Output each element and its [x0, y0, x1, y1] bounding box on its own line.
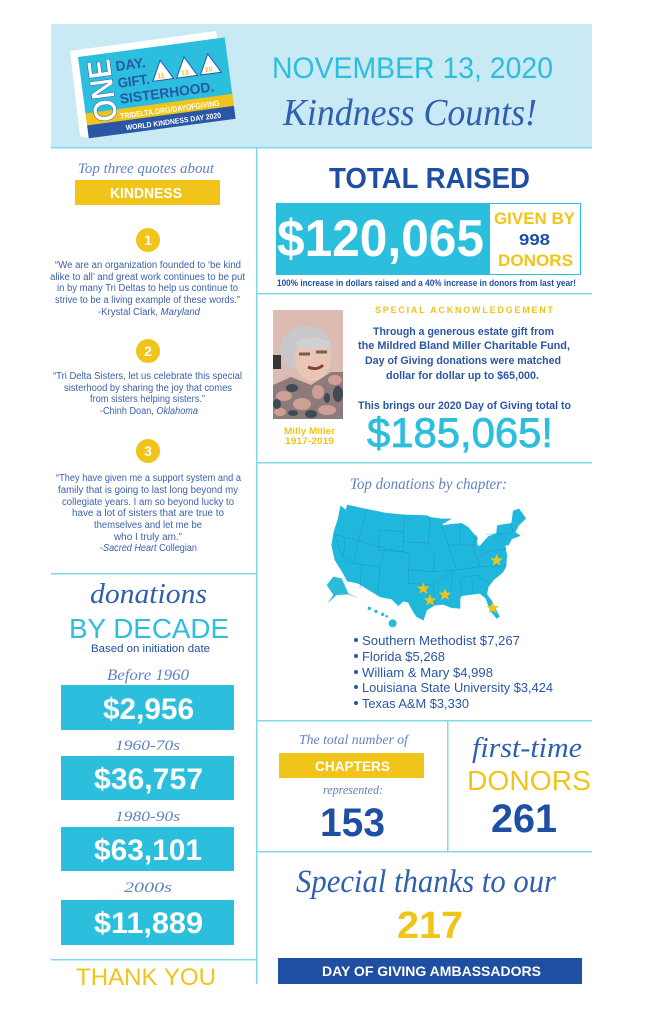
decade label: 1960-70s: [115, 738, 180, 754]
panel: total raised: [276, 163, 580, 289]
decade bar 4: [61, 900, 234, 945]
chapter list: Louisiana State University $3,424: [362, 680, 553, 695]
amount box: [276, 203, 580, 274]
badge 2: [136, 339, 160, 363]
chapters banner: CHAPTERS: [315, 758, 390, 774]
quote 2: “Tri Delta Sisters, let us celebrate this special: [53, 371, 242, 382]
quote 3: who I truly am.”: [113, 532, 182, 543]
chapter list: Texas A&M $3,330: [362, 696, 469, 711]
total raised heading: TOTAL RAISED: [329, 163, 530, 195]
chapter list: William & Mary $4,998: [362, 665, 493, 680]
panel: chapters represented: [279, 733, 424, 845]
quote 1: in by many Tri Deltas to help us continue to: [57, 283, 238, 294]
thanks script: Special thanks to our: [296, 864, 556, 900]
panel: header: [51, 24, 592, 148]
decade label: 2000s: [124, 880, 172, 896]
badge 3: 3: [144, 443, 152, 459]
decade bar 1: $2,956: [103, 693, 194, 726]
chapters banner: [279, 753, 424, 778]
chapter count: 153: [320, 801, 385, 845]
donor count: DONORS: [498, 251, 573, 270]
quotes heading: Top three quotes about: [78, 161, 215, 177]
acknowledgement text: This brings our 2020 Day of Giving total to: [358, 400, 571, 412]
ambassadors banner: [278, 958, 582, 984]
acknowledgement label: SPECIAL ACKNOWLEDGEMENT: [375, 305, 554, 315]
logo card: DAY.: [114, 54, 146, 74]
donors heading: DONORS: [467, 765, 591, 796]
panel: donations by decade: [61, 579, 234, 991]
chapter heading: Top donations by chapter:: [350, 476, 507, 493]
quote 1: [50, 260, 245, 318]
logo card: GIFT.: [117, 71, 151, 91]
panel: top donations by chapter: [327, 476, 553, 711]
decade label: 1980-90s: [115, 809, 180, 825]
by decade heading: BY DECADE: [69, 613, 229, 644]
decade label: Before 1960: [107, 667, 189, 684]
acknowledgement text: dollar for dollar up to $65,000.: [386, 370, 539, 382]
logo card: ONE: [80, 57, 125, 124]
decade bar 2: [61, 756, 234, 800]
quote 3: collegiate years. I am so beyond lucky to: [62, 497, 234, 508]
decade bar 1: [61, 685, 234, 730]
ambassadors banner: DAY OF GIVING AMBASSADORS: [322, 963, 541, 979]
kindness banner: KINDNESS: [110, 185, 182, 202]
badge 1: 1: [144, 232, 152, 248]
quote 3: -Sacred Heart Collegian: [100, 543, 197, 554]
badge 2: 2: [144, 343, 152, 359]
script title: Kindness Counts!: [282, 92, 537, 134]
quote 3: [56, 473, 241, 554]
grand total: $185,065!: [367, 409, 553, 456]
donor count: [494, 209, 576, 270]
donor count: 998: [519, 232, 550, 249]
quote 1: strive to be a living example of these words.”: [55, 295, 240, 306]
chapters intro: The total number of: [299, 733, 410, 748]
logo card: WORLD KINDNESS DAY 2020: [125, 111, 222, 132]
logo card: 13: [181, 69, 189, 77]
first-time script: first-time: [472, 732, 582, 764]
logo card: [70, 31, 236, 138]
subtitle: Based on initiation date: [91, 643, 210, 655]
decade bar 3: [61, 827, 234, 871]
date heading: NOVEMBER 13, 2020: [272, 52, 553, 85]
quote 3: “They have given me a support system and a: [56, 473, 241, 484]
photo caption: Milly Miller: [284, 426, 335, 437]
quote 1: -Krystal Clark, Maryland: [98, 307, 200, 318]
badge 3: [136, 439, 160, 463]
logo card: 20: [204, 66, 213, 74]
badge 1: [136, 228, 160, 252]
quote 3: have a lot of sisters that are true to: [72, 508, 224, 519]
thank you: THANK YOU: [76, 964, 216, 991]
acknowledgement text: Through a generous estate gift from: [373, 326, 554, 338]
amount box: $120,065: [277, 210, 484, 268]
represented label: represented:: [323, 783, 383, 797]
donor count: GIVEN BY: [494, 209, 576, 228]
chapter list: Southern Methodist $7,267: [362, 633, 520, 648]
acknowledgement text: the Mildred Bland Miller Charitable Fund,: [358, 340, 570, 352]
photo: Milly Miller: [273, 310, 343, 419]
quote 2: -Chinh Doan, Oklahoma: [100, 406, 198, 417]
acknowledgement text: [358, 326, 571, 412]
photo caption: [284, 426, 335, 447]
donor count: 261: [491, 797, 557, 841]
chapter list: Florida $5,268: [362, 649, 445, 664]
decade bar 3: $63,101: [94, 834, 202, 867]
logo card: 11: [157, 73, 165, 81]
acknowledgement text: Day of Giving donations were matched: [365, 355, 561, 367]
panel: kindness quotes: [50, 161, 245, 554]
quote 3: family that is going to last long beyond my: [58, 485, 238, 496]
ambassador count: 217: [397, 905, 463, 947]
decade bar 4: $11,889: [94, 907, 203, 940]
quote 2: sisterhood by sharing the joy that comes: [64, 383, 232, 394]
donations script heading: donations: [90, 579, 207, 610]
US map: [327, 505, 526, 627]
chapter list: [354, 633, 553, 711]
panel: special acknowledgement: [273, 305, 571, 456]
panel: first-time donors: [467, 732, 591, 841]
kindness banner: [75, 180, 220, 205]
logo card: TRIDELTA.ORG/DAYOFGIVING: [120, 99, 220, 121]
photo caption: 1917-2019: [285, 436, 334, 447]
logo card: SISTERHOOD.: [119, 78, 215, 107]
panel: ambassadors: [278, 864, 582, 984]
quote 1: alike to all’ and great work continues to be put: [50, 272, 245, 283]
quote 2: from sisters helping sisters.”: [90, 394, 205, 405]
increase note: 100% increase in dollars raised and a 40% increase in donors from last year!: [277, 278, 576, 289]
decade bar 2: $36,757: [94, 763, 203, 796]
quote 2: [53, 371, 242, 417]
quote 3: themselves and let me be: [94, 520, 202, 531]
quote 1: “We are an organization founded to ‘be kind: [55, 260, 241, 271]
